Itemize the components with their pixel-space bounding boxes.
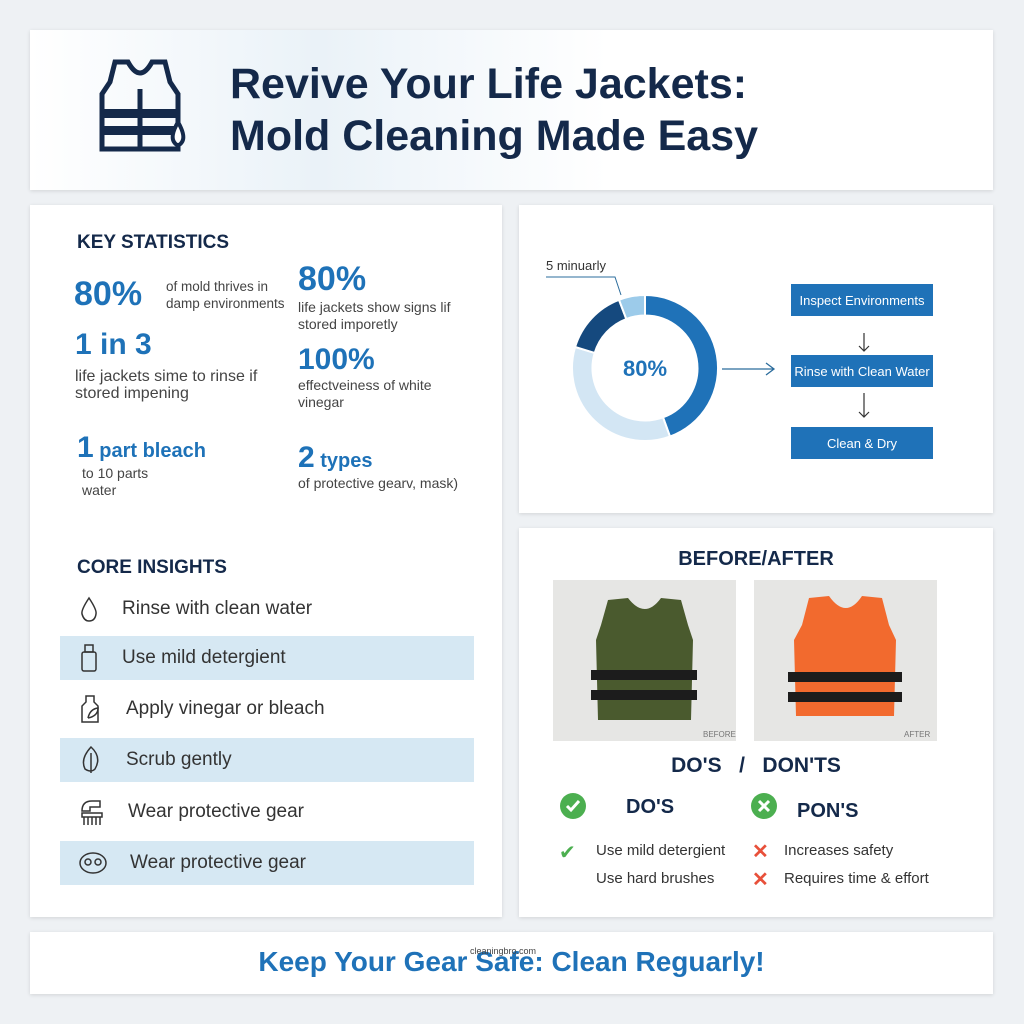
icon: life jacket [100, 60, 186, 152]
stat 80% [74, 275, 285, 313]
insight: protective gear mask [60, 841, 474, 885]
process step 1: Inspect Environments [799, 292, 924, 308]
insight: rinse: Rinse with clean water [122, 598, 312, 619]
insight: rinse [81, 596, 312, 622]
heading: key statistics: KEY STATISTICS [77, 232, 229, 253]
insight: vinegar [81, 695, 325, 723]
insight: scrub: Scrub gently [126, 749, 232, 770]
header panel [30, 30, 993, 190]
don'ts column: Requires time & effort [784, 870, 929, 887]
panel: chart and process [519, 205, 993, 513]
image: after [754, 580, 937, 741]
stat 1 in 3 [75, 328, 258, 402]
insight: protective gear brush: Wear protective gear [128, 801, 304, 822]
title: Revive Your Life Jackets: [230, 60, 747, 108]
do's column: ✔ [559, 842, 576, 864]
don'ts column [751, 793, 929, 891]
image: before [553, 580, 736, 741]
title: Mold Cleaning Made Easy [230, 112, 758, 160]
title [230, 60, 758, 160]
donut chart: 80% [623, 356, 667, 381]
donut chart: 5 minuarly [546, 258, 606, 273]
do's column: Use hard brushes [596, 870, 714, 887]
insight: scrub [60, 738, 474, 782]
process step 3 [791, 427, 933, 459]
process step 3: Clean & Dry [827, 436, 897, 450]
stat 80% jackets [298, 260, 451, 332]
stat 100% [298, 343, 432, 410]
footer banner [30, 932, 993, 994]
do's column [559, 793, 726, 887]
stat bleach: 1 part bleach [77, 431, 206, 464]
don'ts column: ✕ [752, 841, 769, 863]
stat bleach: water [82, 482, 116, 498]
process step 2 [791, 355, 933, 387]
stat 80% jackets: life jackets show signs lif stored imporetly [298, 299, 451, 332]
stat 80% jackets: 80% [298, 260, 366, 298]
image: after: AFTER [904, 730, 930, 739]
stat 2 types [298, 441, 458, 491]
stat bleach: to 10 parts [82, 465, 148, 481]
stat 2 types: 2 types [298, 441, 372, 474]
do's column: Use mild detergient [596, 842, 725, 859]
image: before: BEFORE [703, 730, 736, 739]
insight: detergent [60, 636, 474, 680]
stat 1 in 3: life jackets sime to rinse if stored impening [75, 368, 257, 402]
stat 2 types: of protective gearv, mask) [298, 475, 458, 491]
stat 80%: of mold thrives in damp environments [166, 279, 285, 311]
insight: vinegar: Apply vinegar or bleach [126, 698, 325, 719]
heading: core insights: CORE INSIGHTS [77, 557, 227, 578]
stat bleach [77, 431, 206, 498]
panel: key statistics & core insights [30, 205, 502, 917]
insight: protective gear brush [81, 800, 304, 825]
stat 1 in 3: 1 in 3 [75, 328, 152, 361]
footer banner: Keep Your Gear Safe: Clean Reguarly! [258, 946, 765, 977]
panel: before/after and do's [519, 528, 993, 917]
don'ts column: ✕ [752, 869, 769, 891]
stat 80%: 80% [74, 275, 142, 313]
stat 100%: effectveiness of white vinegar [298, 377, 432, 410]
heading: do's / don'ts: DO'S / DON'TS [671, 754, 841, 777]
insight: detergent: Use mild detergient [122, 647, 286, 668]
do's column: DO'S [626, 796, 674, 818]
footer banner: cleaningbro.com [470, 946, 536, 956]
stat 100%: 100% [298, 343, 375, 376]
don'ts column: PON'S [797, 800, 858, 822]
process step 1 [791, 284, 933, 316]
don'ts column: Increases safety [784, 842, 893, 859]
insight: protective gear mask: Wear protective gear [130, 852, 306, 873]
heading: before/after: BEFORE/AFTER [678, 548, 834, 570]
donut chart [546, 258, 870, 440]
process step 2: Rinse with Clean Water [794, 364, 930, 378]
